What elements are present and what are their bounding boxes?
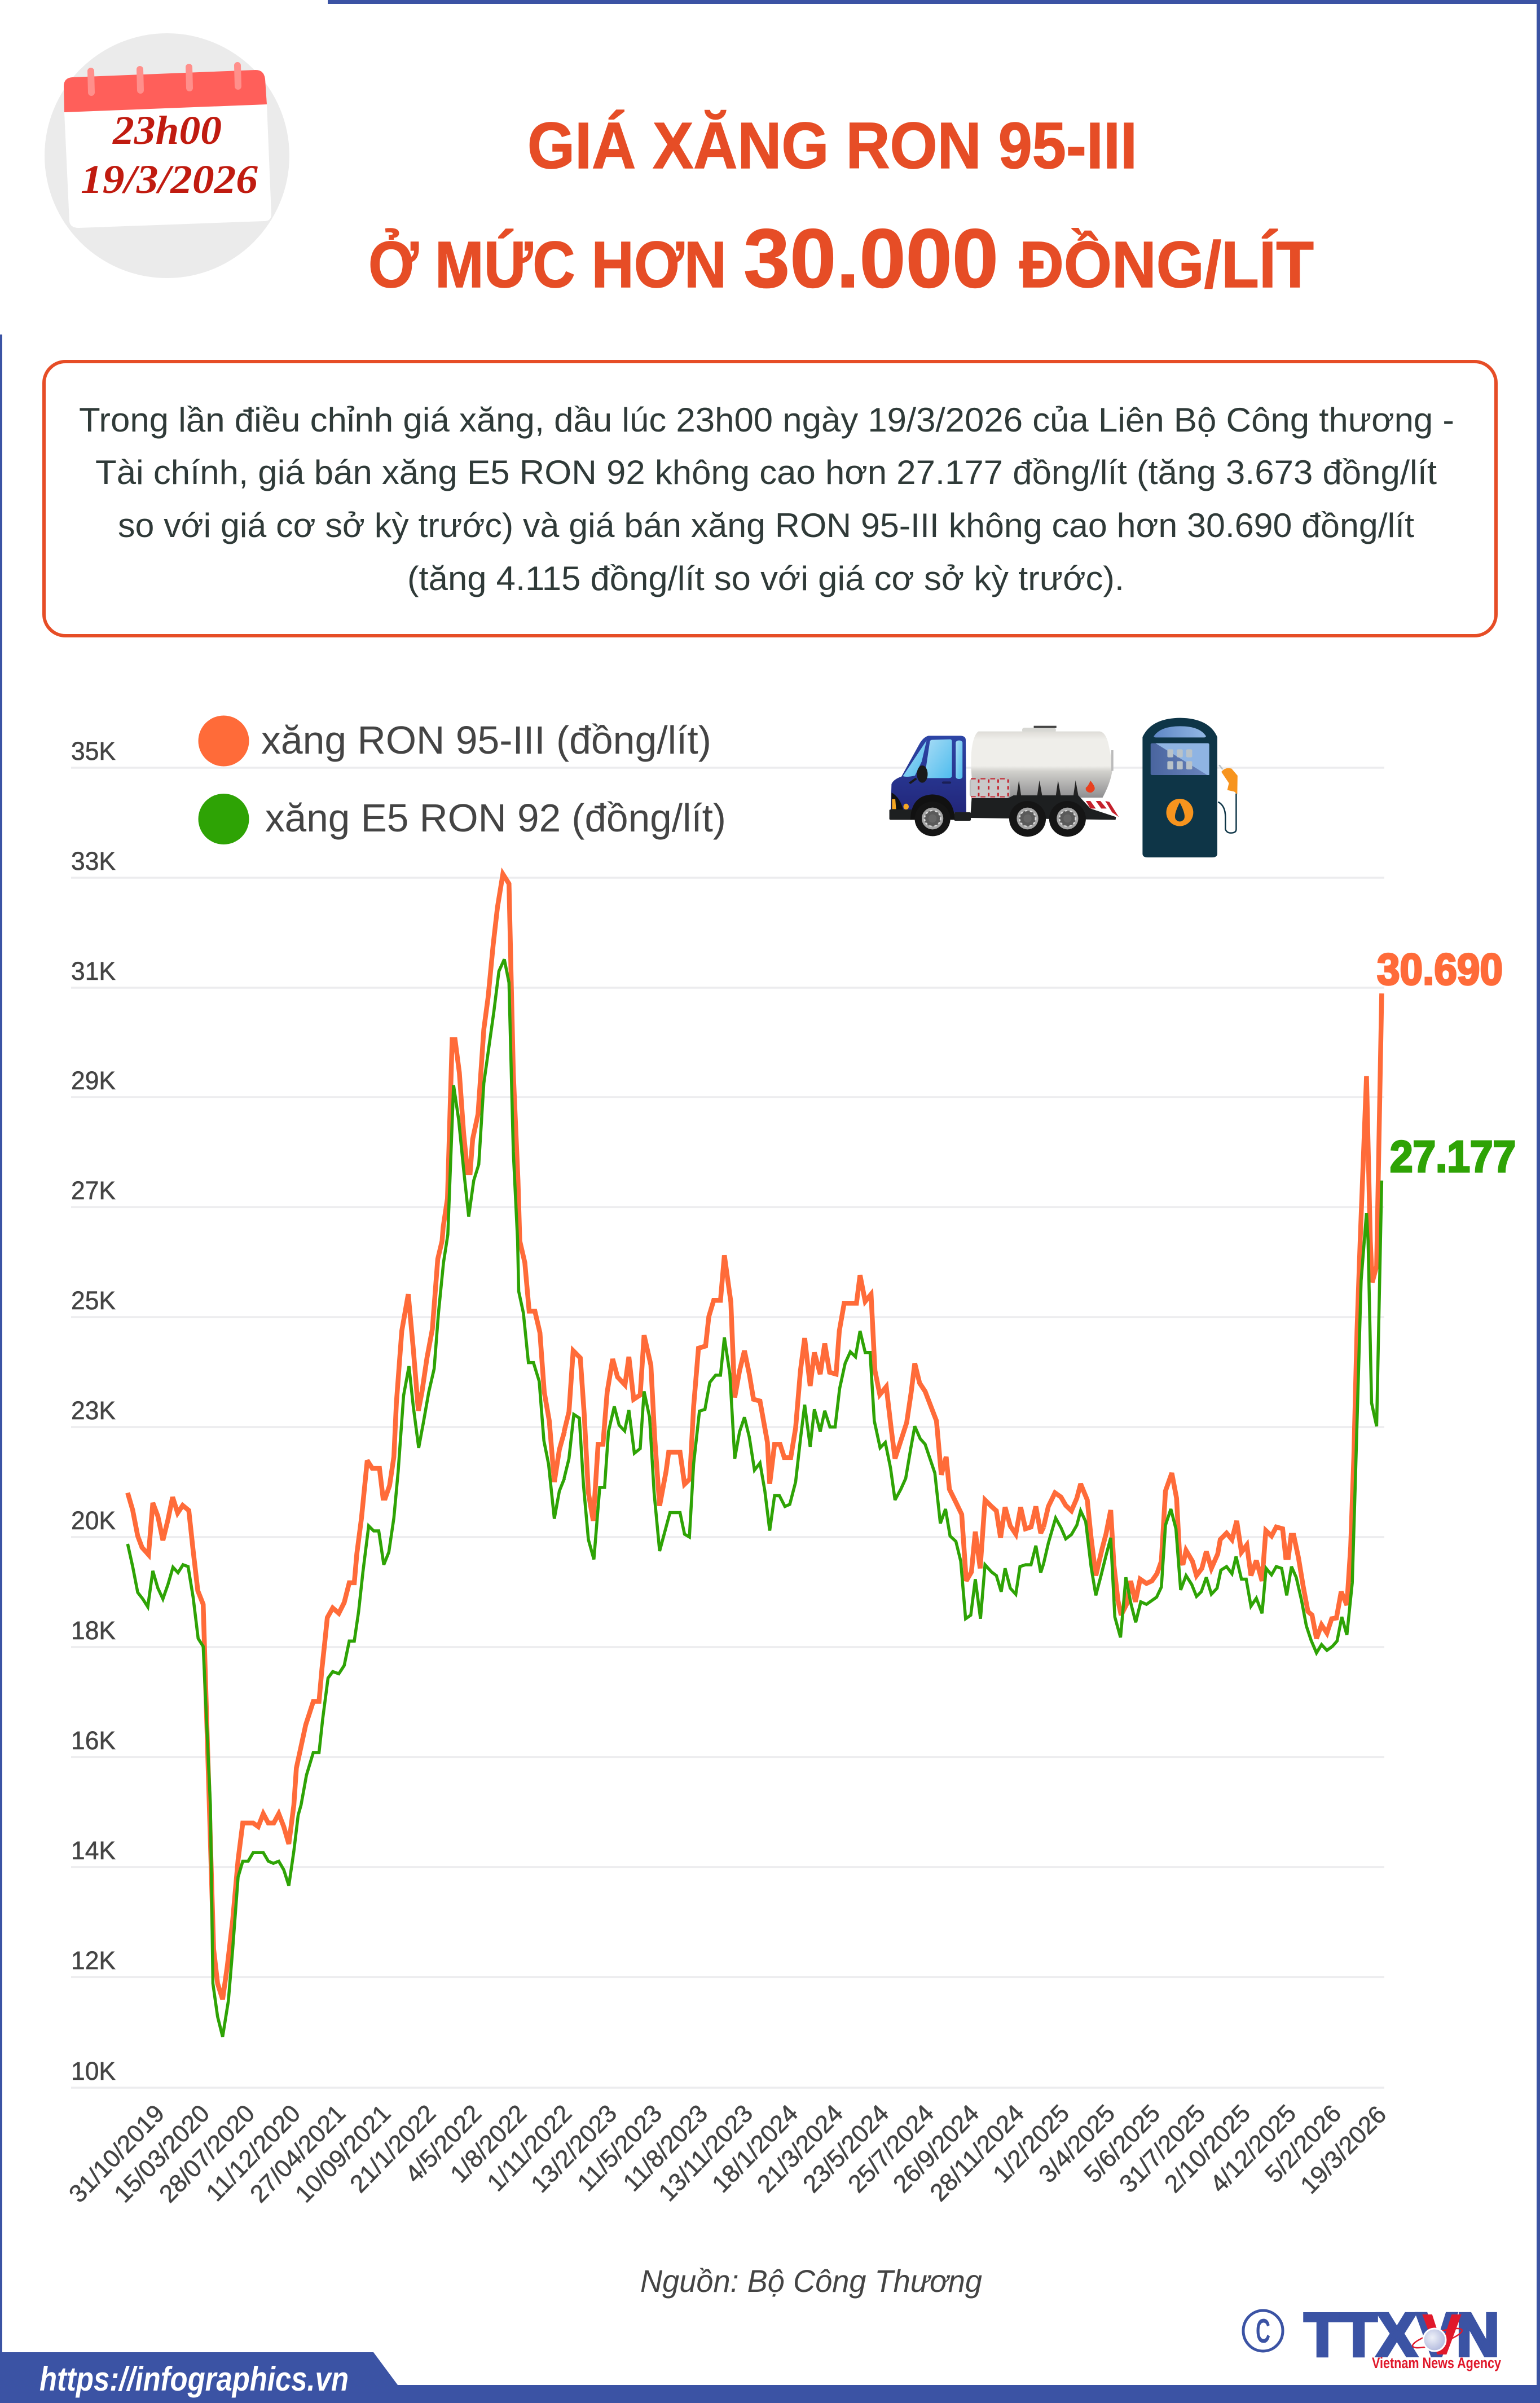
chart: x axis date labels: 1/11/2022 [482,2100,577,2197]
chart: x axis date labels: 1/8/2022 [445,2100,532,2188]
logo: copyright mark and TTXVN: C [1256,2312,1270,2350]
chart: x axis date labels: 5/6/2025 [1079,2100,1165,2188]
chart: x axis date labels: 13/11/2023 [653,2100,758,2207]
chart: gridlines and y axis: 27K [71,1176,116,1205]
footer: bar with website url: https://infographics.vn [39,2360,349,2398]
title: Ở MỨC HƠN [368,228,727,301]
chart line: xăng E5 RON 92 [127,960,1381,2037]
chart: x axis date labels: 27/04/2021 [245,2100,351,2208]
chart: gridlines and y axis: 14K [71,1836,116,1865]
legend [199,715,726,844]
chart: gridlines and y axis: 20K [71,1506,116,1535]
icon: calendar with date [45,33,289,278]
chart: x axis date labels: 19/3/2026 [1295,2101,1392,2199]
chart: x axis date labels: 11/5/2023 [572,2100,667,2197]
panel: summary text: Trong lần điều chỉnh giá xăng, dầu lúc 23h00 ngày 19/3/2026 của Liên Bộ Công thương - [79,401,1454,439]
title [368,109,1314,305]
panel: summary text: (tăng 4.115 đồng/lít so với giá cơ sở kỳ trước). [407,560,1124,597]
footer: bar with website url [0,2352,1540,2403]
title: GIÁ XĂNG RON 95-III [527,109,1137,182]
logo: copyright mark and TTXVN: TTXVN [1304,2300,1499,2369]
panel: summary text: Tài chính, giá bán xăng E5 RON 92 không cao hơn 27.177 đồng/lít (tăng 3.673 đồng/lít [95,454,1437,491]
chart: x axis date labels [64,2100,1392,2208]
panel: summary text [44,362,1496,636]
chart: gridlines and y axis: 18K [71,1616,116,1645]
chart: gridlines and y axis: 23K [71,1396,116,1425]
chart: gridlines and y axis: 12K [71,1946,116,1975]
chart line: xăng RON 95-III [127,874,1381,1999]
chart: x axis date labels: 15/03/2020 [109,2100,215,2208]
chart: x axis date labels: 3/4/2025 [1033,2100,1120,2188]
logo: copyright mark and TTXVN: V [1423,2303,1461,2366]
chart: x axis date labels: 2/10/2025 [1159,2100,1256,2198]
chart: gridlines and y axis: 16K [71,1726,116,1755]
chart: x axis date labels: 21/1/2022 [345,2100,441,2198]
chart: x axis date labels: 31/10/2019 [64,2100,170,2208]
chart: x axis date labels: 31/7/2025 [1114,2100,1211,2198]
title: ĐỒNG/LÍT [1019,228,1314,301]
legend: xăng RON 95-III (đồng/lít) [261,718,711,762]
chart: gridlines and y axis: 10K [71,2057,116,2085]
chart: x axis date labels: 23/5/2024 [798,2100,894,2198]
icon: fuel pump [1142,718,1238,857]
icon: calendar with date: 23h00 [112,108,222,153]
chart: x axis date labels: 10/09/2021 [290,2100,396,2208]
chart: x axis date labels: 5/2/2026 [1260,2100,1347,2188]
icon: calendar with date: 19/3/2026 [81,157,258,202]
chart: x axis date labels: 13/2/2023 [526,2100,622,2198]
chart: x axis date labels: 26/9/2024 [888,2100,984,2198]
legend: xăng E5 RON 92 (đồng/lít) [265,796,726,840]
value label: 27.177: 27.177 [1390,1132,1516,1181]
chart: x axis date labels: 4/5/2022 [400,2100,487,2188]
chart: gridlines and y axis: 35K [71,737,116,765]
chart: gridlines and y axis [71,737,1384,2088]
chart: x axis date labels: 11/12/2020 [201,2100,306,2207]
source note: Nguồn: Bộ Công Thương [640,2263,982,2299]
chart: x axis date labels: 25/7/2024 [843,2100,939,2198]
title: 30.000 [743,212,998,305]
panel: summary text: so với giá cơ sở kỳ trước) và giá bán xăng RON 95-III không cao hơn 30.690 đồng/lít [118,507,1414,544]
chart: x axis date labels: 18/1/2024 [707,2100,803,2198]
chart: x axis date labels: 28/11/2024 [925,2100,1029,2207]
value label: 30.690: 30.690 [1377,944,1503,994]
icon: tanker truck [890,726,1119,837]
chart: gridlines and y axis: 33K [71,847,116,875]
chart: gridlines and y axis: 25K [71,1286,116,1315]
chart: gridlines and y axis: 31K [71,957,116,985]
chart: x axis date labels: 11/8/2023 [618,2100,713,2197]
chart: x axis date labels: 1/2/2025 [988,2100,1075,2188]
logo: copyright mark and TTXVN: Vietnam News Agency [1372,2354,1501,2371]
chart: x axis date labels: 28/07/2020 [154,2100,260,2208]
chart: gridlines and y axis: 29K [71,1066,116,1095]
chart: x axis date labels: 4/12/2025 [1205,2100,1301,2198]
chart: x axis date labels: 21/3/2024 [752,2100,848,2198]
